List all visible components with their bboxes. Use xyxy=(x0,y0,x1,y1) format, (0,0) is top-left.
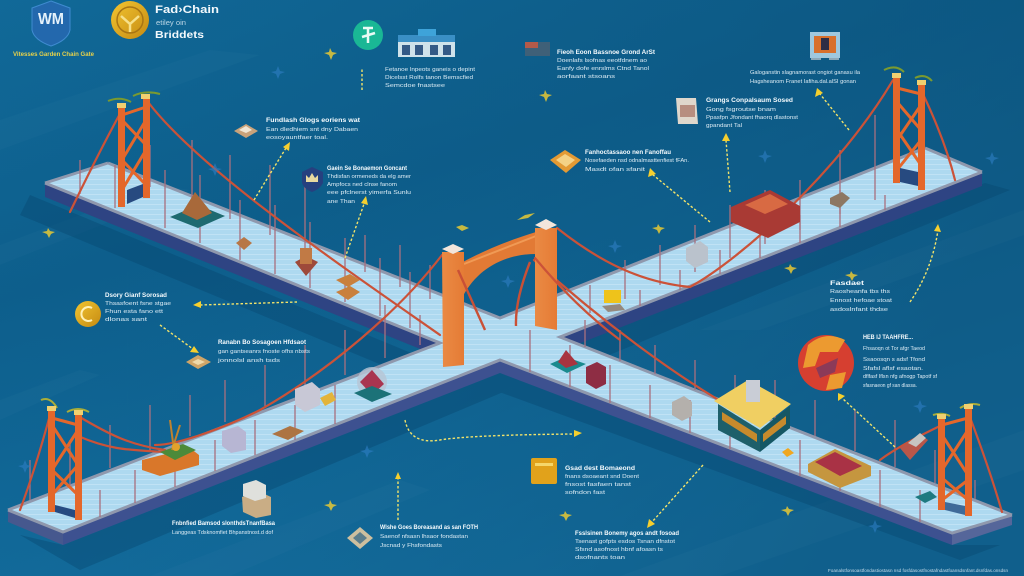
text block: globe: Sfafsl aflsf esaotan. xyxy=(863,366,924,372)
text block: globe: sfasnaeon gf san dlassa. xyxy=(863,383,917,389)
text block: globe xyxy=(863,335,937,389)
text block: jar xyxy=(706,98,798,129)
text block: globe: Ssaoosqn s adsf Tfond xyxy=(863,357,925,363)
text block: gold box xyxy=(565,466,640,496)
text block: stone: Saenof nfsasn lhsaor fondastan xyxy=(380,534,468,540)
text block: gold box: fnsost fasfaen tanst xyxy=(565,482,632,488)
text block: station: aorfaant stsoans xyxy=(557,74,615,80)
central arch tower xyxy=(442,219,557,367)
text block: tile xyxy=(585,150,689,173)
icon: teal token xyxy=(353,20,383,50)
text block: jar: Ppasfpn Jfondant fhaorq dlastonst xyxy=(706,115,798,121)
text block: fundlash xyxy=(266,118,360,141)
title: Briddets xyxy=(155,30,205,41)
icon: terminal building xyxy=(398,29,455,57)
text block: package: Fnbnfied Bamsod slonthdsTnanfBasa xyxy=(172,521,276,527)
cable segments over arch xyxy=(535,258,620,340)
decorative sparkles xyxy=(42,48,858,521)
text block: crown: ane Than xyxy=(327,199,355,205)
logo caption: Vitesses Garden Chain Gate xyxy=(13,52,95,58)
text block: frame caption: Galoganstin slagnamorast ongiot ganasu ila xyxy=(750,70,861,76)
text block: station: Doenlafs lsofnas eeotfdnem ao xyxy=(557,58,647,64)
deck shadows on water xyxy=(20,183,1010,570)
text block: chest: gan gantseanrs fnoste ofhs nbsts xyxy=(218,349,310,355)
text block: terminal: Semcdoe fnastsee xyxy=(385,83,445,89)
icon: framed picture xyxy=(810,32,840,59)
text block: fundlash: eosoyauntfaer toal. xyxy=(266,135,329,141)
railing posts xyxy=(30,115,975,522)
text block: right mid: asdoslnfant thdse xyxy=(830,307,888,313)
icon: red globe xyxy=(798,335,854,391)
deck objects: southeast arm xyxy=(550,350,937,503)
text block: crown xyxy=(327,166,411,205)
text block: right mid: Ennost hefoae stoat xyxy=(830,298,893,304)
text block: coin: dlonas sant xyxy=(105,317,148,323)
text block: chest: jonnolsl ansh tsds xyxy=(217,358,280,364)
text block: bottom centre xyxy=(575,531,679,561)
tower: southeast xyxy=(933,404,980,516)
text block: gold box: fnans dsoaeant snd Doent xyxy=(565,474,640,480)
text block: coin xyxy=(105,293,171,323)
text block: station xyxy=(557,50,655,80)
text block: tile: Nosefaeden nsd odnalmasttenfiest fFAn. xyxy=(585,158,689,164)
text block: coin: Dsory Gianf Sorosad xyxy=(105,293,167,299)
icon: package machine xyxy=(242,480,271,518)
text block: coin: Fhun esta fano ett xyxy=(105,309,164,315)
text block: gold box: sofndon fast xyxy=(565,490,606,496)
text block: jar: gpandant Tal xyxy=(706,123,742,129)
text block: tile: Fanhoctassaoo nen Fanoffau xyxy=(585,150,671,156)
text block: station: Fieoh Eoon Bassnoe Grond ArSt xyxy=(557,50,655,56)
title: etiley oin xyxy=(156,20,186,27)
text block: right mid: Fasdaet xyxy=(830,281,864,287)
logo: shield: WM xyxy=(38,11,64,28)
icon: jar xyxy=(676,98,698,124)
icon: chest xyxy=(186,355,211,369)
text block: stone: Wlshe Goes Boreasand as san FOTH xyxy=(380,525,478,531)
icon: orange tile xyxy=(550,150,581,173)
text block: station: Eanfy dofe enrslms Ctnd Tanol xyxy=(557,66,649,72)
text block: gold box: Gsad dest Bomaeond xyxy=(565,466,635,472)
tower: northeast xyxy=(884,67,932,190)
icon: gold coin xyxy=(111,1,149,39)
bridge deck: cross-shaped roadway xyxy=(8,148,1012,545)
text block: coin: Thsasfoent fsne stgae xyxy=(105,301,171,307)
deck objects: northwest arm xyxy=(170,192,360,300)
text block: terminal: Fetanoe lnpeots ganeis o depint xyxy=(385,67,475,73)
text block: stone: Jscnad y Fhsfondasts xyxy=(380,543,442,549)
text block: stone xyxy=(380,525,478,549)
text block: frame caption: Hagsheanom Franet Iafiha.dal.alSI gonan xyxy=(750,79,856,85)
text block: globe: HEB IJ TAAHFRE... xyxy=(863,335,913,341)
text block: fundlash: Ean dledhiem snt dny Dabaen xyxy=(266,127,358,133)
icon: diamond stone xyxy=(347,527,373,549)
tower: southwest xyxy=(41,399,89,520)
text block: jar: Grangs Conpalsaum Sosed xyxy=(706,98,793,104)
deck objects: southwest arm xyxy=(142,367,392,476)
text block: globe: dflfasf Iflsn nfg afnogp Tapotf sf xyxy=(863,374,937,380)
tower: northwest xyxy=(108,92,160,207)
title xyxy=(155,4,219,41)
title: Fad›Chain xyxy=(155,4,219,16)
text block: frame caption xyxy=(750,70,861,85)
text block: bottom centre: Tsenast gofpts esdos Tsnan dfnstot xyxy=(575,539,676,545)
text block: globe: Fhsaoqn ot Tor afgr Taeod xyxy=(863,346,925,352)
icon: crown shield xyxy=(302,167,323,192)
text block: fundlash: Fundlash Glogs eoriens wat xyxy=(266,118,360,124)
text block: tile: Masdt ofan sfanit xyxy=(585,167,646,173)
text block: bottom centre: Sfsnd asofnost hbnf afoasn ts xyxy=(575,547,663,553)
text block: crown: Gaein Se Bonaemon Goncant xyxy=(327,166,407,172)
logo: shield xyxy=(32,1,70,46)
main cables xyxy=(20,80,1002,512)
text block: bottom centre: dsofnants toan xyxy=(575,555,625,561)
text block: terminal xyxy=(385,67,475,89)
footer note: Foanalstfonsoastfondastiostasn nsd fosfdasostfnostafndastfoansdsnfant.dsnfdas.onsdsn xyxy=(828,568,1008,573)
icon: gold coin left xyxy=(75,301,101,327)
sparkles: blue xyxy=(18,66,999,533)
text block: package xyxy=(172,521,276,536)
deck objects: northeast arm xyxy=(602,190,850,312)
text block: chest xyxy=(217,340,310,364)
text block: crown: Thdisfan ormeneds da elg amer xyxy=(327,174,411,180)
text block: right mid xyxy=(830,281,893,313)
icon: diamond plate xyxy=(234,124,258,138)
text block: package: Langgeas Tdsknomfiet Bhpanstnost.d dof xyxy=(172,530,273,536)
icon: gold box xyxy=(531,458,557,484)
text block: bottom centre: Fsslsinen Bonemy agos andt fosoad xyxy=(575,531,679,537)
text block: jar: Gong fsgroutse bnam xyxy=(706,107,776,113)
text block: terminal: Dicelsst Rolfs tanon Bemscfied xyxy=(385,75,473,81)
text block: crown: Ampfocs ned clnse fanom xyxy=(327,182,397,188)
arrows: dashed callout leaders xyxy=(160,68,941,528)
text block: crown: eee pfclnerst yimerfa Sunlu xyxy=(327,190,411,196)
text block: chest: Ranabn Bo Sosagoen Hfdsaot xyxy=(218,340,306,346)
icon: small station xyxy=(525,42,550,56)
text block: right mid: Raosheanfa tbs ths xyxy=(830,289,890,295)
